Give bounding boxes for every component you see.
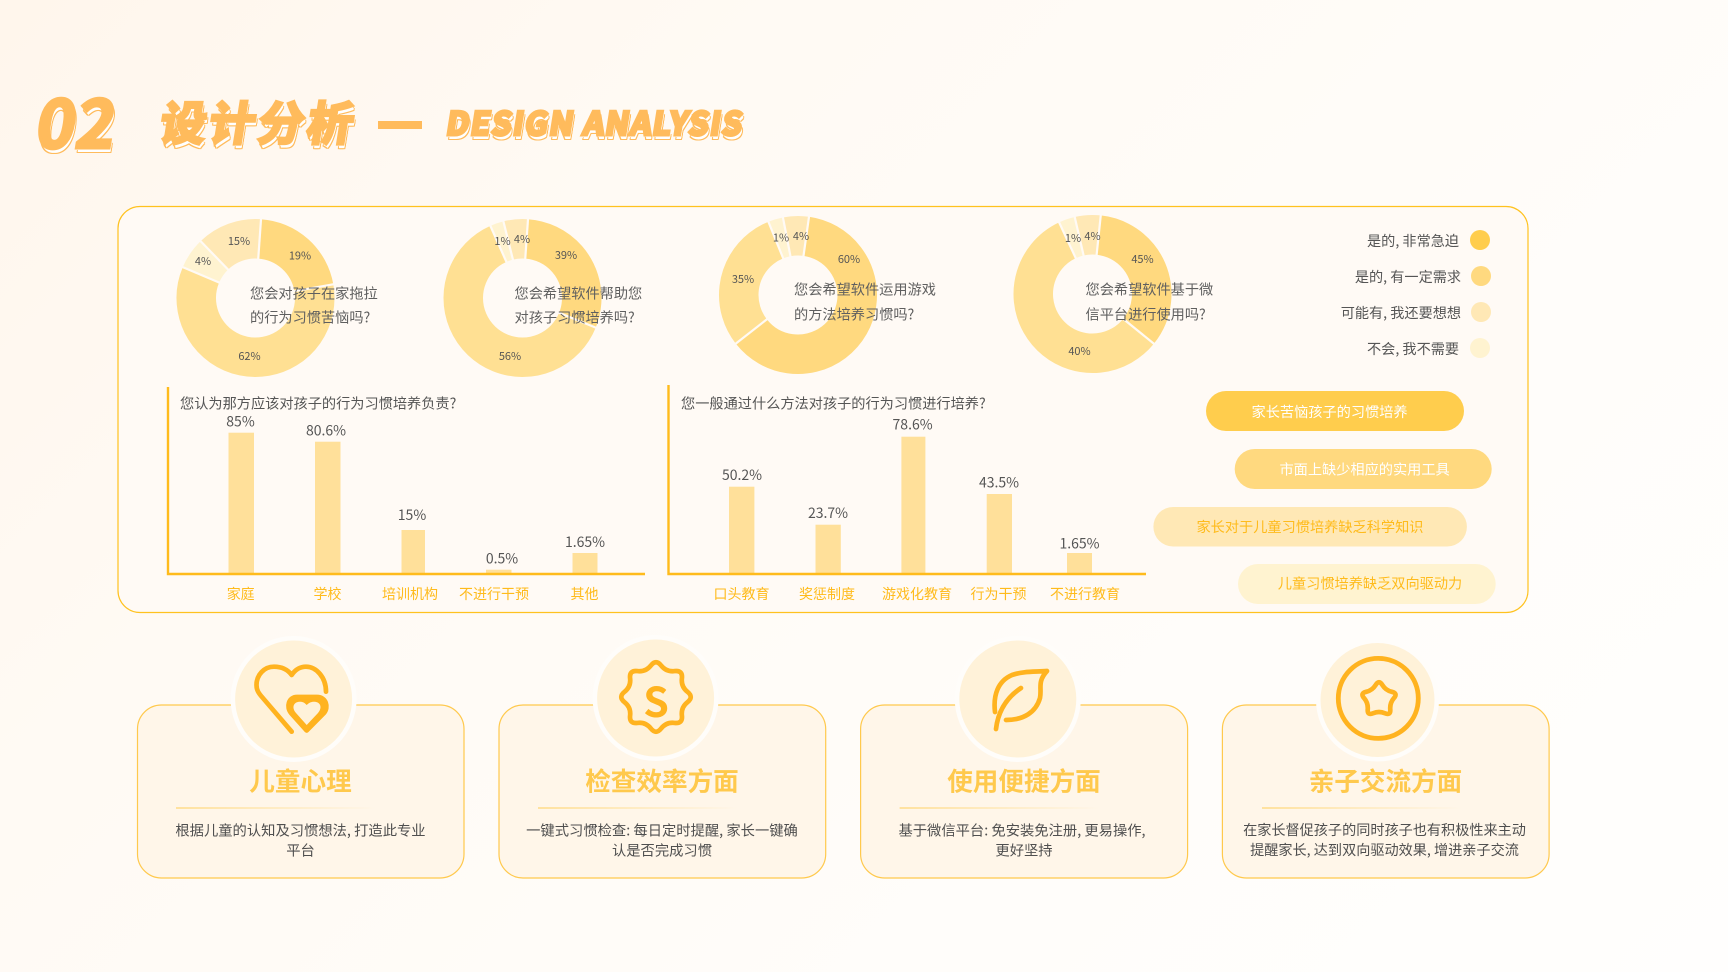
donut 1 question: 的行为习惯苦恼吗? bbox=[250, 308, 370, 328]
bar chart: cultivation methods: 78.6% bbox=[893, 415, 933, 435]
icon: leaf bbox=[955, 636, 1081, 762]
card: child psychology bbox=[138, 636, 464, 878]
card: child psychology: 根据儿童的认知及习惯想法, 打造此专业 bbox=[175, 820, 426, 840]
pill: lack of motivation: 儿童习惯培养缺乏双向驱动力 bbox=[1278, 574, 1462, 594]
donut chart 3: 60% bbox=[838, 251, 860, 267]
bar chart: who is responsible: 0.5% bbox=[486, 548, 518, 568]
bar chart: who is responsible: 其他 bbox=[570, 584, 598, 604]
card: check efficiency: 认是否完成习惯 bbox=[612, 840, 712, 860]
card: parent-child communication: 亲子交流方面 bbox=[1309, 762, 1462, 798]
icon: star in ring bbox=[1316, 638, 1439, 762]
donut 2 question bbox=[514, 284, 642, 328]
donut 2 question: 对孩子习惯培养吗? bbox=[514, 308, 635, 328]
donut chart 2: 39% bbox=[555, 247, 577, 263]
legend: 不会, 我不需要 bbox=[1367, 339, 1459, 359]
bar chart: cultivation methods: 50.2% bbox=[722, 465, 762, 485]
bar chart: who is responsible bbox=[168, 387, 645, 604]
card: ease of use bbox=[861, 636, 1188, 878]
donut chart 1: 62% bbox=[238, 348, 261, 364]
bar chart: cultivation methods: 1.65% bbox=[1059, 534, 1100, 554]
donut 1 question bbox=[250, 284, 378, 328]
bar chart: who is responsible: 学校 bbox=[314, 584, 342, 604]
donut chart 4: 1% bbox=[1065, 230, 1081, 246]
donut 2 question: 您会希望软件帮助您 bbox=[514, 284, 642, 304]
english heading: DESIGN ANALYSIS bbox=[443, 99, 748, 145]
donut chart 4: 40% bbox=[1068, 343, 1091, 359]
donut chart 2: 4% bbox=[514, 231, 530, 247]
card: check efficiency: 一键式习惯检查: 每日定时提醒, 家长一键确 bbox=[526, 820, 798, 840]
card: parent-child communication: 提醒家长, 达到双向驱动效果, 增进亲子交流 bbox=[1250, 840, 1519, 860]
card: child psychology: 平台 bbox=[286, 840, 315, 860]
bar chart: who is responsible: 15% bbox=[398, 505, 426, 525]
bar chart: cultivation methods bbox=[668, 385, 1146, 604]
card: parent-child communication: 在家长督促孩子的同时孩子也有积极性来主动 bbox=[1243, 820, 1526, 840]
bar chart: cultivation methods: 游戏化教育 bbox=[882, 584, 952, 604]
legend: 可能有, 我还要想想 bbox=[1341, 303, 1461, 323]
bar chart: who is responsible: 培训机构 bbox=[382, 584, 438, 604]
donut 4 question bbox=[1086, 280, 1213, 324]
donut 1 question: 您会对孩子在家拖拉 bbox=[250, 284, 378, 304]
icon: heart bbox=[231, 636, 357, 762]
bar chart: cultivation methods: 奖惩制度 bbox=[799, 584, 855, 604]
legend: 是的, 有一定需求 bbox=[1355, 267, 1461, 287]
pill: lack of tools bbox=[1235, 449, 1492, 489]
bar chart: who is responsible: 您认为那方应该对孩子的行为习惯培养负责? bbox=[180, 394, 456, 414]
bar chart: cultivation methods: 43.5% bbox=[979, 473, 1019, 493]
donut 3 question bbox=[794, 280, 936, 324]
card: ease of use: 基于微信平台: 免安装免注册, 更易操作, bbox=[898, 820, 1146, 840]
donut chart 4: 45% bbox=[1131, 251, 1154, 267]
title bbox=[30, 72, 748, 168]
pill: lack of motivation bbox=[1238, 564, 1496, 604]
donut chart 1 bbox=[172, 214, 378, 382]
icon: badge S bbox=[593, 635, 719, 761]
icon: badge S: S bbox=[643, 669, 669, 729]
bar chart: who is responsible: 1.65% bbox=[565, 532, 605, 552]
heading dash bbox=[378, 121, 422, 129]
bar chart: who is responsible: 80.6% bbox=[306, 420, 346, 440]
bar chart: cultivation methods: 您一般通过什么方法对孩子的行为习惯进行培养? bbox=[681, 394, 986, 414]
donut 4 question: 信平台进行使用吗? bbox=[1086, 304, 1206, 324]
pill: lack of knowledge: 家长对于儿童习惯培养缺乏科学知识 bbox=[1196, 517, 1424, 537]
card: check efficiency: 检查效率方面 bbox=[585, 762, 739, 798]
donut 3 question: 的方法培养习惯吗? bbox=[794, 304, 914, 324]
donut 4 question: 您会希望软件基于微 bbox=[1086, 280, 1213, 300]
card: check efficiency bbox=[499, 635, 826, 878]
bar chart: cultivation methods: 不进行教育 bbox=[1050, 584, 1120, 604]
pill: lack of knowledge bbox=[1153, 507, 1467, 546]
bar chart: cultivation methods: 口头教育 bbox=[714, 584, 770, 604]
donut chart 2: 1% bbox=[494, 233, 511, 249]
card: parent-child communication bbox=[1222, 638, 1549, 878]
card: ease of use: 使用便捷方面 bbox=[947, 762, 1101, 798]
card: child psychology: 儿童心理 bbox=[249, 762, 352, 798]
donut chart 1: 15% bbox=[228, 233, 250, 249]
pill: lack of tools: 市面上缺少相应的实用工具 bbox=[1279, 460, 1450, 480]
pill: parents worry: 家长苦恼孩子的习惯培养 bbox=[1252, 402, 1408, 422]
legend: 是的, 非常急迫 bbox=[1367, 231, 1459, 251]
donut chart 1: 19% bbox=[289, 248, 311, 264]
card: ease of use: 更好坚持 bbox=[995, 840, 1053, 860]
chinese heading: 设计分析 bbox=[156, 88, 362, 154]
donut chart 3: 1% bbox=[773, 230, 789, 246]
donut 3 question: 您会希望软件运用游戏 bbox=[794, 280, 936, 300]
donut chart 2: 56% bbox=[499, 348, 521, 364]
bar chart: who is responsible: 家庭 bbox=[227, 584, 255, 604]
donut chart 3: 4% bbox=[793, 228, 809, 244]
panel: survey results bbox=[118, 206, 1528, 612]
donut chart 2 bbox=[444, 217, 642, 376]
bar chart: who is responsible: 85% bbox=[226, 412, 255, 432]
bar chart: cultivation methods: 行为干预 bbox=[970, 584, 1026, 604]
bar chart: cultivation methods: 23.7% bbox=[808, 503, 848, 523]
section number: 02 bbox=[30, 72, 125, 168]
donut chart 4 bbox=[1009, 211, 1213, 377]
donut chart 4: 4% bbox=[1084, 228, 1101, 244]
donut chart 1: 4% bbox=[195, 253, 211, 269]
donut chart 3 bbox=[715, 212, 936, 378]
pill: parents worry bbox=[1206, 391, 1464, 431]
legend bbox=[1341, 230, 1491, 359]
bar chart: who is responsible: 不进行干预 bbox=[459, 584, 529, 604]
donut chart 3: 35% bbox=[732, 271, 754, 287]
